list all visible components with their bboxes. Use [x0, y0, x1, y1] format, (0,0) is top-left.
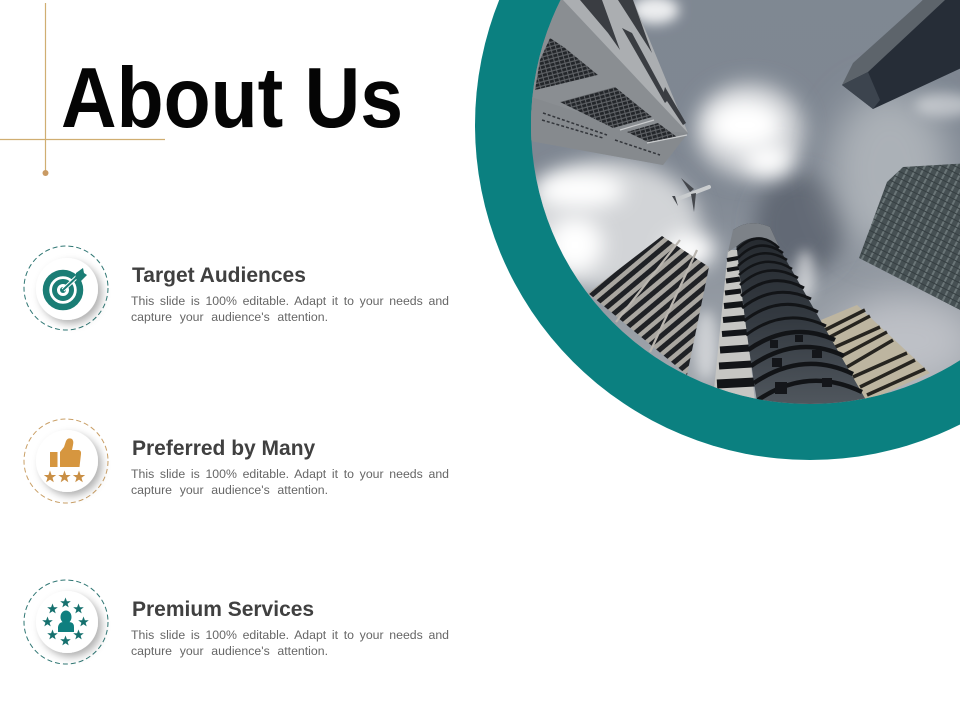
title accent dot — [42, 170, 48, 176]
clouds — [520, 0, 960, 385]
teal ring — [475, 0, 960, 460]
heading: Target Audiences — [132, 264, 306, 287]
item: target audiences — [24, 246, 449, 330]
building: top right — [842, 0, 960, 109]
icon: person with stars — [24, 580, 108, 664]
description: capture your audience's attention. — [131, 483, 328, 497]
description: This slide is 100% editable. Adapt it to your needs and — [131, 294, 449, 308]
building: cylindrical tower — [712, 223, 866, 420]
airplane — [672, 178, 709, 212]
icon: target — [24, 246, 108, 330]
building: top left — [525, 0, 688, 165]
building: lower left — [588, 236, 709, 375]
item: premium services — [24, 580, 449, 664]
sky — [520, 0, 960, 410]
photo: skyscrapers seen from below — [520, 0, 960, 420]
title: About Us — [61, 51, 403, 146]
icon: thumbs up with stars — [24, 418, 108, 504]
heading: Preferred by Many — [132, 437, 315, 460]
building: beige striped — [821, 305, 930, 400]
heading: Premium Services — [132, 598, 314, 621]
description — [131, 294, 449, 324]
building: right — [859, 163, 960, 315]
description: capture your audience's attention. — [131, 310, 328, 324]
item: preferred by many — [24, 418, 449, 504]
description — [131, 628, 449, 658]
description: capture your audience's attention. — [131, 644, 328, 658]
decorative cross lines — [0, 3, 165, 173]
description: This slide is 100% editable. Adapt it to your needs and — [131, 628, 449, 642]
description: This slide is 100% editable. Adapt it to your needs and — [131, 467, 449, 481]
description — [131, 467, 449, 497]
